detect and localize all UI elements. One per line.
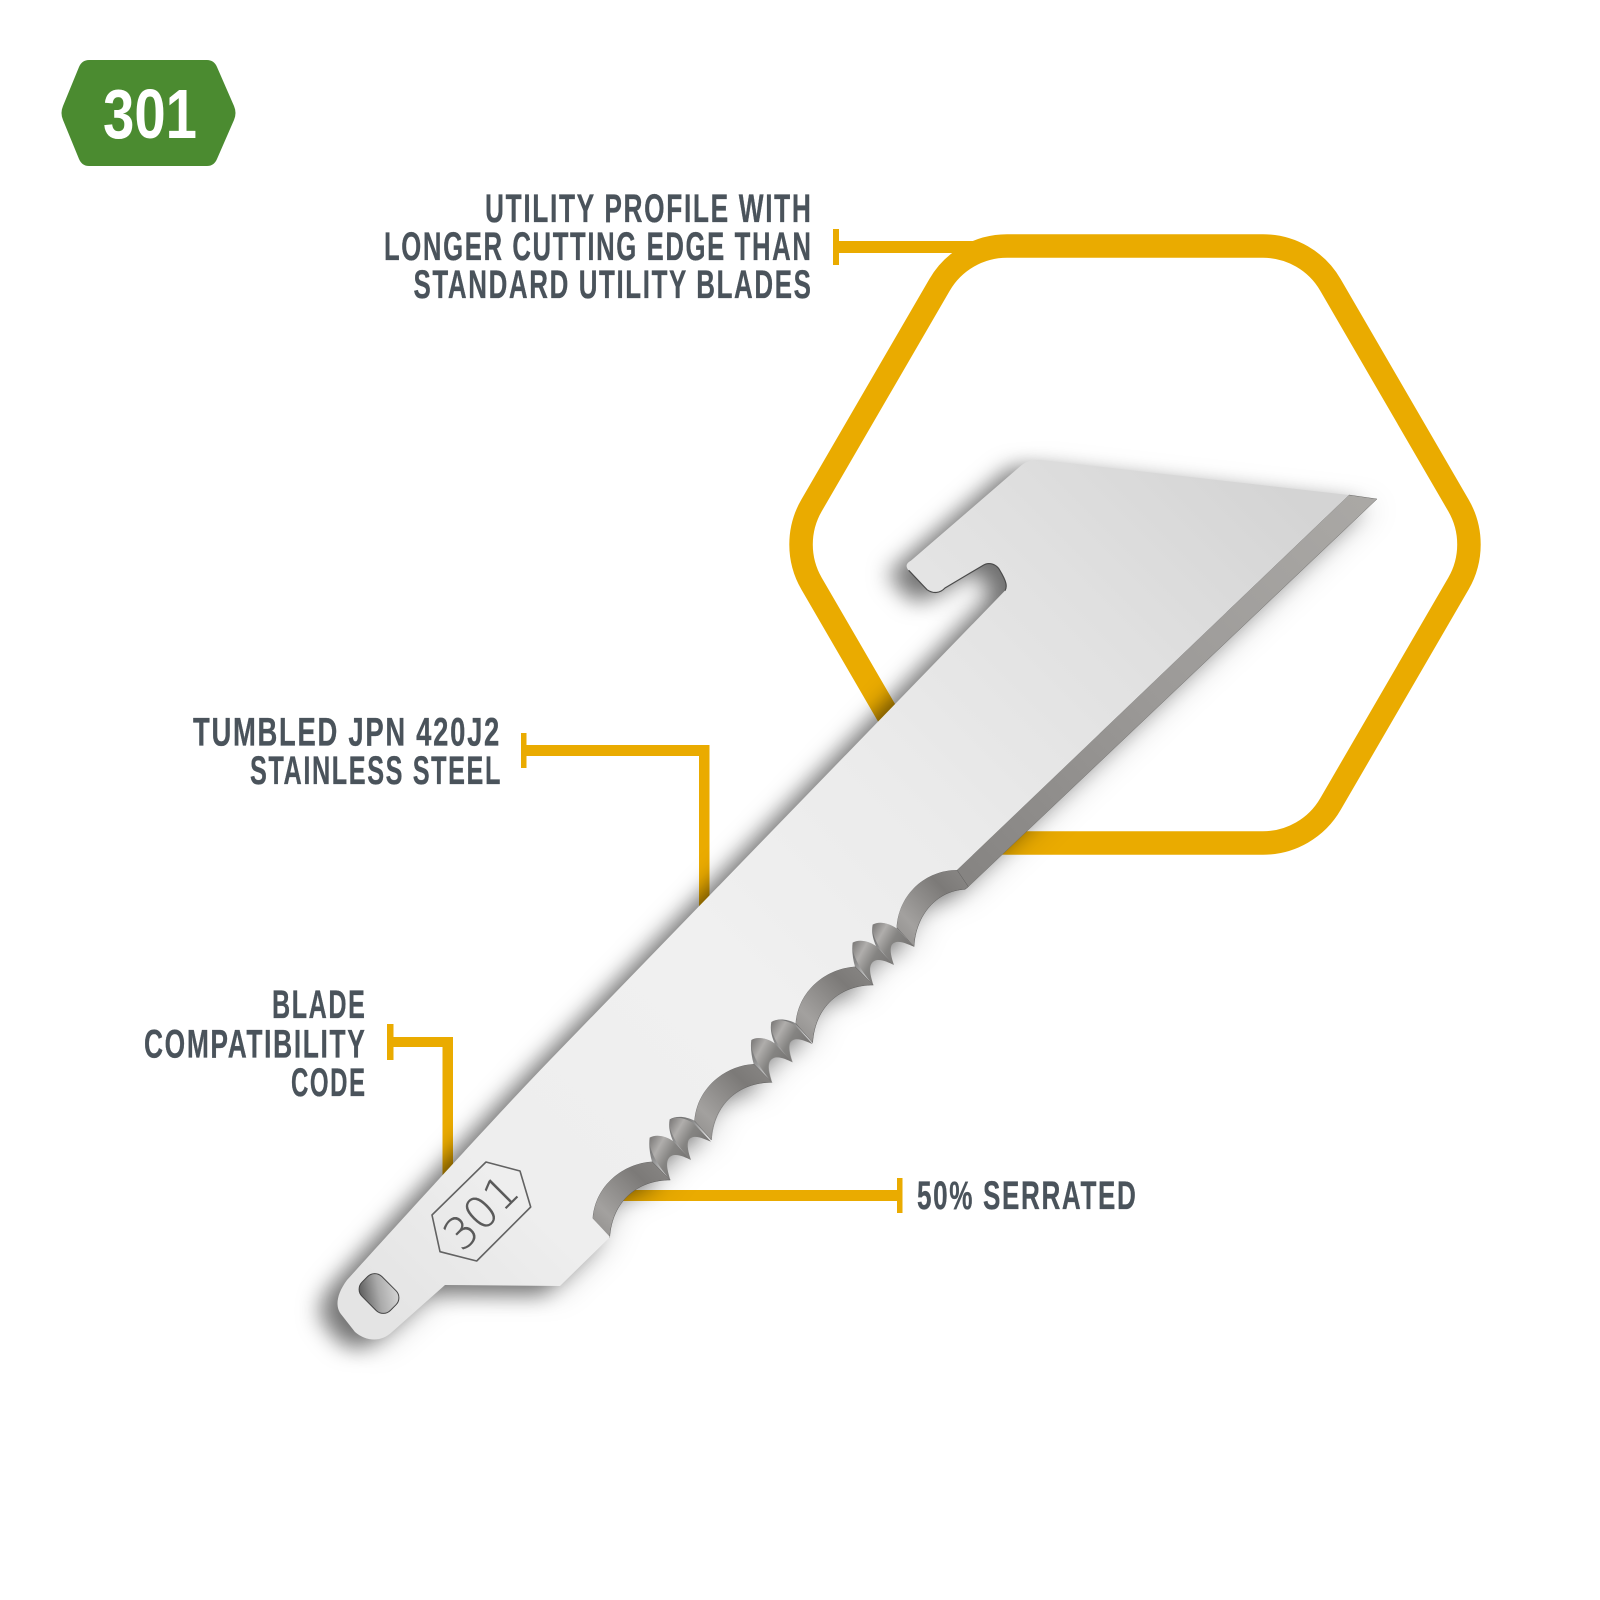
text: stainless steel: TUMBLED JPN 420J2 bbox=[193, 710, 501, 754]
text: utility profile bbox=[384, 187, 812, 307]
serration set two bbox=[694, 1020, 813, 1140]
hexagon outline bbox=[801, 246, 1469, 843]
leader: stainless steel bbox=[521, 733, 710, 925]
badge: 301 bbox=[62, 60, 236, 166]
text: compatibility code: COMPATIBILITY bbox=[144, 1022, 366, 1066]
first scallop bbox=[897, 870, 968, 947]
notch edge bbox=[909, 564, 1006, 593]
text: stainless steel bbox=[193, 710, 502, 793]
text: stainless steel: STAINLESS STEEL bbox=[250, 749, 502, 793]
text: utility profile: STANDARD UTILITY BLADES bbox=[414, 263, 812, 307]
text: compatibility code bbox=[144, 983, 366, 1105]
text: serrated: 50% SERRATED bbox=[917, 1174, 1138, 1218]
leader: compatibility code bbox=[387, 1024, 453, 1190]
leader: utility profile bbox=[833, 229, 975, 265]
blade bbox=[337, 460, 1377, 1340]
text: utility profile: UTILITY PROFILE WITH bbox=[485, 187, 812, 231]
hanging hole bbox=[355, 1269, 403, 1318]
engraved code mark: 301 bbox=[434, 1165, 529, 1261]
serration set three bbox=[593, 1118, 711, 1238]
blade bevel bbox=[955, 495, 1377, 889]
text: utility profile: LONGER CUTTING EDGE THAN bbox=[384, 225, 812, 269]
text: compatibility code: BLADE bbox=[272, 983, 366, 1027]
blade flat surface bbox=[337, 460, 1349, 1340]
serration set one bbox=[796, 923, 914, 1043]
badge: 301: 301 bbox=[103, 75, 197, 153]
text: compatibility code: CODE bbox=[291, 1061, 366, 1105]
leader: serrated bbox=[610, 1178, 902, 1213]
